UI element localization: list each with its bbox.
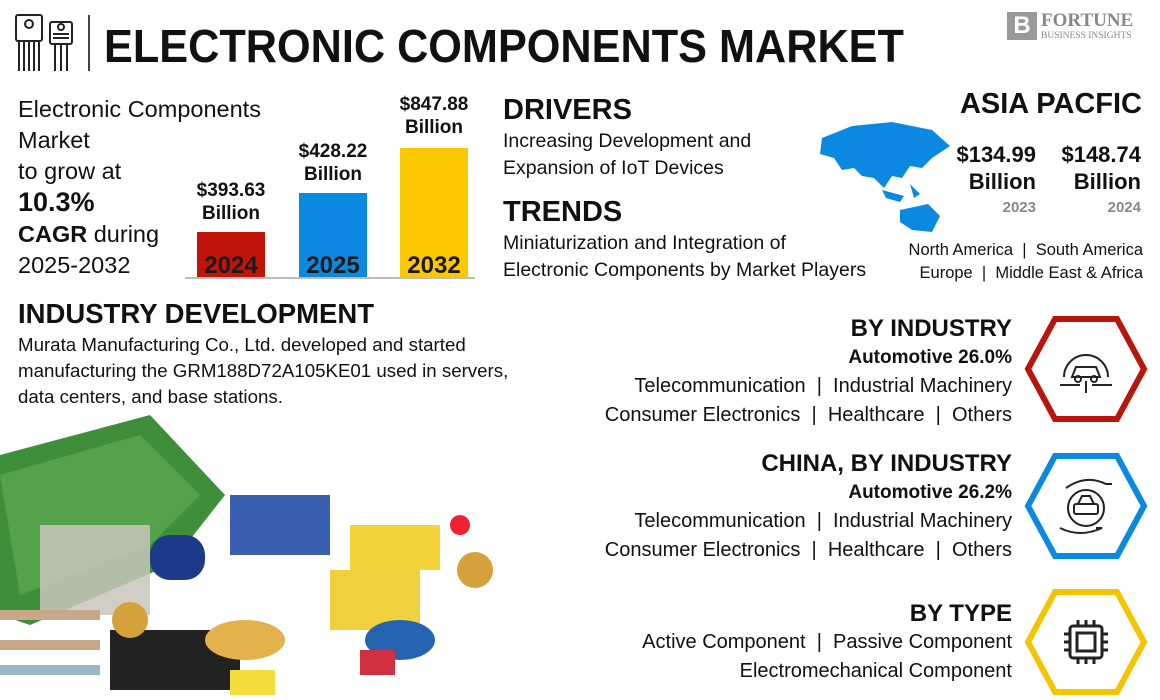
- bar chart: [185, 94, 475, 279]
- hexagon: type: [1024, 589, 1148, 695]
- logo: BUSINESS INSIGHTS: [1041, 31, 1132, 41]
- asia 2023: Billion: [969, 169, 1036, 194]
- drivers: Expansion of IoT Devices: [503, 157, 724, 179]
- map: asia pacific: [820, 122, 950, 232]
- trends: Miniaturization and Integration of: [503, 232, 786, 254]
- drivers: DRIVERS: [503, 94, 632, 126]
- regions: North America | South America: [909, 241, 1143, 259]
- asia 2024: Billion: [1074, 169, 1141, 194]
- label 2025: $428.22: [299, 141, 367, 162]
- asia 2023: 2023: [1003, 199, 1036, 216]
- industry development: INDUSTRY DEVELOPMENT: [18, 298, 374, 329]
- drivers: Increasing Development and: [503, 130, 751, 152]
- by type: Electromechanical Component: [740, 660, 1012, 682]
- by industry: Consumer Electronics | Healthcare | Others: [605, 404, 1012, 426]
- drivers: [503, 94, 751, 179]
- label 2024: Billion: [202, 203, 260, 224]
- by industry: [605, 315, 1012, 426]
- asia pacific heading: ASIA PACFIC: [960, 88, 1142, 120]
- regions: [909, 241, 1144, 282]
- by type: Active Component | Passive Component: [642, 631, 1012, 653]
- china by industry: Automotive 26.2%: [848, 482, 1012, 503]
- text: CAGR statement: to grow at: [18, 158, 121, 184]
- by type: [642, 600, 1012, 682]
- asia 2024: 2024: [1108, 199, 1141, 216]
- bar 2025: 2025: [306, 252, 360, 279]
- text: CAGR statement: CAGR during: [18, 221, 159, 247]
- bar 2025: [299, 193, 367, 277]
- icon: transistor header: [15, 14, 73, 71]
- hexagon: industry: [1024, 316, 1148, 422]
- bar 2024: 2024: [204, 252, 258, 279]
- china by industry: Consumer Electronics | Healthcare | Others: [605, 539, 1012, 561]
- by industry: Automotive 26.0%: [848, 347, 1012, 368]
- text: CAGR statement: 2025-2032: [18, 252, 130, 278]
- asia 2024: $148.74: [1061, 142, 1141, 167]
- logo: B: [1013, 12, 1031, 39]
- asia 2023: [956, 142, 1036, 216]
- trends: [503, 196, 866, 281]
- text: CAGR statement: Market: [18, 127, 90, 153]
- label 2025: Billion: [304, 164, 362, 185]
- bar 2024: [197, 232, 265, 277]
- trends: TRENDS: [503, 196, 622, 228]
- china by industry: Telecommunication | Industrial Machinery: [634, 510, 1012, 532]
- logo: [1007, 10, 1133, 41]
- trends: Electronic Components by Market Players: [503, 259, 866, 281]
- by type: BY TYPE: [910, 600, 1012, 627]
- industry development: data centers, and base stations.: [18, 386, 283, 407]
- text: CAGR statement: [18, 96, 261, 278]
- text: CAGR statement: 10.3%: [18, 187, 95, 217]
- label 2032: [400, 94, 468, 138]
- industry development: Murata Manufacturing Co., Ltd. developed and started: [18, 334, 466, 355]
- logo: FORTUNE: [1041, 10, 1133, 31]
- label 2025: [298, 141, 367, 185]
- regions: Europe | Middle East & Africa: [920, 264, 1143, 282]
- china by industry: CHINA, BY INDUSTRY: [761, 450, 1012, 477]
- label 2032: $847.88: [400, 94, 468, 115]
- bar 2032: 2032: [407, 252, 461, 279]
- industry development: manufacturing the GRM188D72A105KE01 used in servers,: [18, 360, 508, 381]
- divider: [88, 15, 90, 71]
- china by industry: [605, 450, 1012, 561]
- label 2024: $393.63: [197, 180, 265, 201]
- hexagon: china: [1024, 453, 1148, 559]
- label 2032: Billion: [405, 117, 463, 138]
- label 2024: [196, 180, 265, 224]
- industry development: [18, 298, 508, 407]
- title: ELECTRONIC COMPONENTS MARKET: [104, 20, 904, 72]
- text: CAGR statement: Electronic Components: [18, 96, 261, 122]
- asia 2024: [1061, 142, 1141, 216]
- by industry: BY INDUSTRY: [851, 315, 1012, 342]
- by industry: Telecommunication | Industrial Machinery: [634, 375, 1012, 397]
- bar 2032: [400, 148, 468, 277]
- image: electronic components photo: [0, 415, 493, 695]
- asia 2023: $134.99: [956, 142, 1036, 167]
